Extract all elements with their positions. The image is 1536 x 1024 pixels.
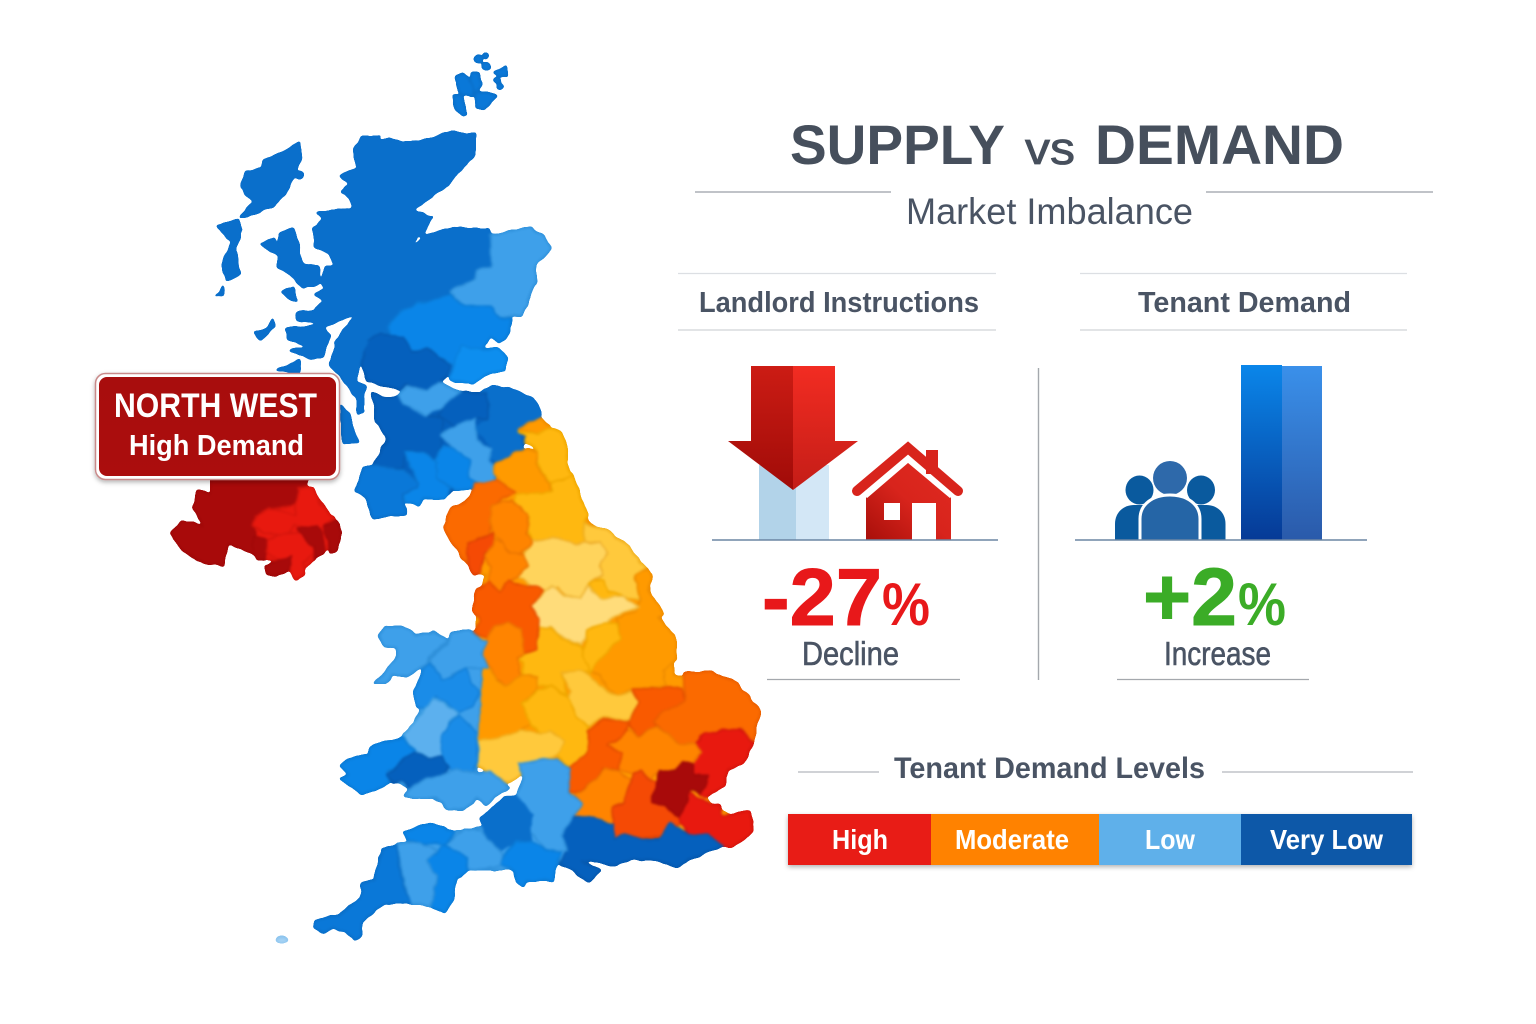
title: vs	[1025, 123, 1075, 174]
map region: England	[443, 416, 760, 846]
stat: +2% increase: +2	[1143, 552, 1237, 643]
icon: rising blue bar	[1241, 365, 1322, 540]
legend: demand levels bar: High	[832, 824, 888, 855]
map region: Wales	[340, 627, 510, 811]
map region: Northern Ireland	[170, 477, 342, 580]
legend: demand levels bar	[788, 814, 1412, 865]
divider	[1038, 368, 1040, 680]
legend heading: Tenant Demand Levels	[894, 752, 1205, 785]
label: Decline: Decline	[802, 635, 899, 672]
subtitle: Market Imbalance	[906, 191, 1193, 232]
stat: +2% increase	[1143, 552, 1286, 643]
stat: -27% decline: -27	[762, 553, 882, 643]
stat: -27% decline: %	[882, 571, 930, 638]
callout: North West high demand badge	[96, 374, 340, 480]
callout: North West high demand badge: NORTH WEST	[114, 387, 317, 425]
legend: demand levels bar: Moderate	[955, 824, 1069, 855]
stat: +2% increase: %	[1238, 571, 1286, 638]
map region: Shetland, Orkney and Hebrides islands	[214, 54, 507, 443]
icon: down arrow over shrinking bar	[728, 366, 858, 540]
legend: demand levels bar: Very Low	[1270, 824, 1383, 855]
legend: demand levels bar: Low	[1145, 824, 1195, 855]
map region: South West and South Coast England	[276, 759, 723, 943]
map region: Scotland	[297, 133, 552, 519]
label: Increase: Increase	[1164, 635, 1271, 672]
icon: people group	[1115, 461, 1226, 541]
title: DEMAND	[1095, 113, 1344, 176]
stat: -27% decline	[762, 553, 930, 643]
heading: Tenant Demand: Tenant Demand	[1138, 287, 1351, 319]
map: UK tenant demand choropleth	[170, 54, 760, 943]
title	[790, 113, 1344, 176]
heading: Landlord Instructions: Landlord Instructions	[699, 287, 979, 319]
callout: North West high demand badge: High Demand	[129, 430, 304, 462]
icon: red house	[857, 448, 958, 540]
title: SUPPLY	[790, 113, 1005, 176]
